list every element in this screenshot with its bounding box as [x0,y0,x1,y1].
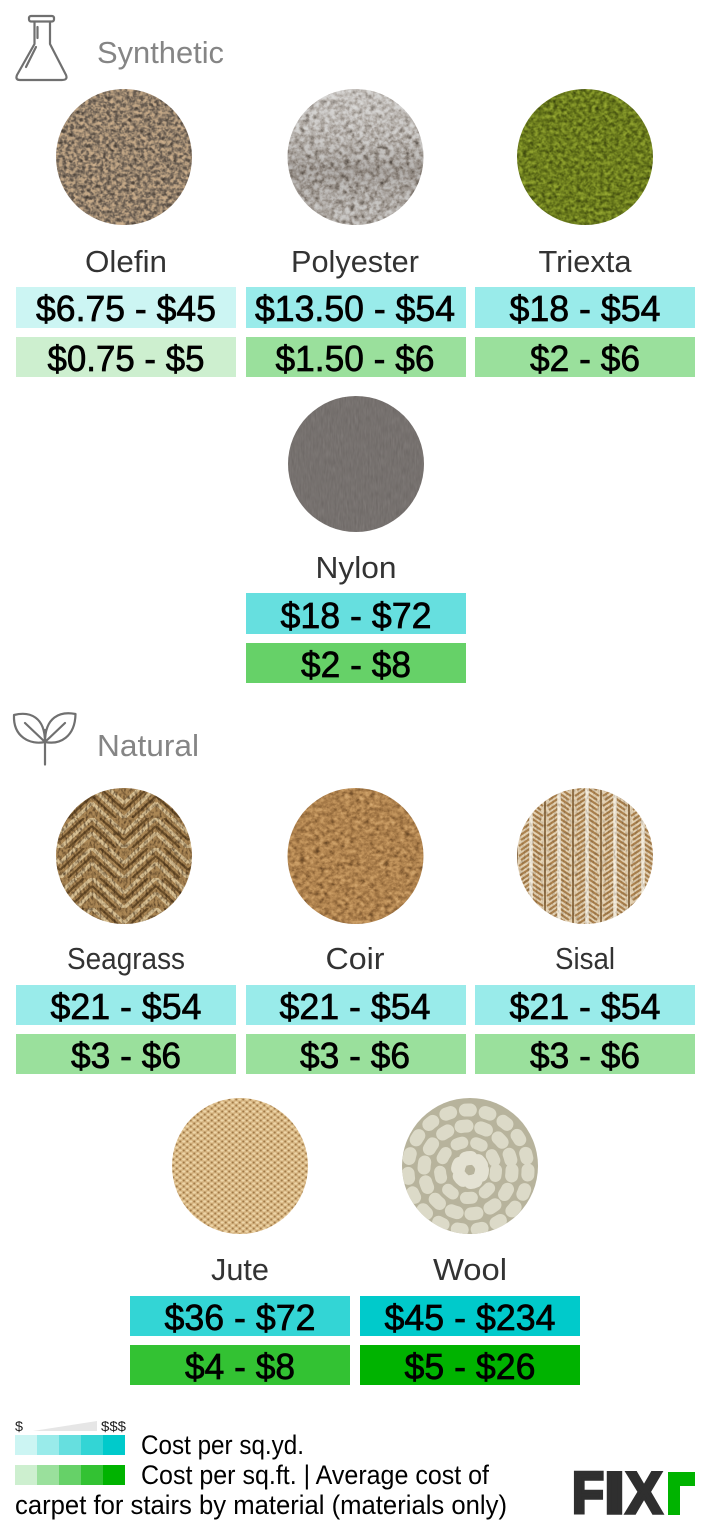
cost per sq.ft.: $5 - $26 [404,1346,536,1387]
card: Wool [360,1098,580,1387]
cost per sq.yd.: $45 - $234 [384,1297,556,1338]
carpet swatch: Coir [287,788,424,924]
logo: Fixr [572,1461,695,1526]
cost per sq.yd. [475,287,695,329]
cost per sq.yd. [246,985,466,1027]
carpet swatch: Seagrass [56,788,192,924]
label: Nylon [316,550,396,585]
label: Triexta [538,244,632,279]
cost per sq.ft. [130,1345,350,1387]
cost per sq.yd.: $21 - $54 [50,986,202,1027]
cost per sq.ft.: $4 - $8 [185,1346,295,1387]
heading text: Natural [97,728,199,763]
cost per sq.ft. [16,1034,236,1076]
legend text: sq.ft. and caption: Cost per sq.ft. | Average cost of [141,1460,489,1490]
label: Coir [326,941,384,976]
logo: Fixr: F [572,1461,604,1526]
swatches: cost per sq.yd. [15,1435,125,1455]
cost per sq.yd.: $13.50 - $54 [255,288,455,329]
label: Polyester [291,244,419,279]
label: Seagrass [67,941,185,976]
cost per sq.yd.: $21 - $54 [510,986,660,1027]
cost per sq.ft. [475,337,695,379]
label: Olefin [85,244,167,279]
cost per sq.ft. [360,1345,580,1387]
price scale wedge: $$$ [101,1418,126,1434]
card: Nylon [246,396,466,685]
cost per sq.yd.: $36 - $72 [164,1297,316,1338]
cost per sq.ft.: $2 - $8 [301,644,411,685]
cost per sq.yd. [16,985,236,1027]
card: Jute [130,1098,350,1387]
logo: Fixr: I [604,1461,625,1526]
cost per sq.yd.: $21 - $54 [280,986,430,1027]
section heading: Synthetic [16,16,224,80]
cost per sq.yd.: $6.75 - $45 [36,288,216,329]
label: Jute [211,1252,269,1287]
card: Triexta [475,89,695,379]
cost per sq.ft.: $3 - $6 [71,1035,181,1076]
carpet swatch: Triexta [517,89,653,225]
card: Sisal [475,788,695,1076]
carpet swatch: Olefin [56,89,192,225]
logo: Fixr: r [668,1470,680,1526]
logo: Fixr: X [626,1461,662,1526]
card: Seagrass [16,788,236,1076]
caption continuation: carpet for stairs by material (materials only) [15,1490,507,1520]
card: Coir [246,788,466,1076]
carpet swatch: Wool [402,1098,538,1234]
price scale wedge: $ [15,1418,23,1434]
cost per sq.yd. [246,593,466,636]
cost per sq.ft. [475,1034,695,1076]
heading text: Synthetic [97,35,224,70]
icon: sprout [14,713,76,764]
icon: flask [16,16,66,80]
cost per sq.ft.: $3 - $6 [300,1035,410,1076]
legend text: sq.yd.: Cost per sq.yd. [141,1430,304,1460]
legend [15,1418,507,1520]
cost per sq.ft.: $3 - $6 [530,1035,640,1076]
label: Wool [433,1252,507,1287]
price scale wedge [15,1418,126,1434]
cost per sq.ft.: $1.50 - $6 [276,338,434,379]
cost per sq.yd. [130,1296,350,1338]
cost per sq.ft.: $2 - $6 [530,338,640,379]
carpet swatch: Nylon [288,396,424,532]
carpet swatch: Jute [172,1098,308,1234]
card: Olefin [16,89,236,379]
cost per sq.yd.: $18 - $54 [510,288,660,329]
swatches: cost per sq.ft. [15,1465,125,1485]
cost per sq.ft. [246,1034,466,1076]
carpet swatch: Polyester [287,89,424,225]
label: Sisal [555,941,615,976]
section heading: Natural [14,713,199,764]
cost per sq.ft. [246,643,466,685]
carpet swatch: Sisal [517,788,653,924]
cost per sq.ft.: $0.75 - $5 [48,338,204,379]
card: Polyester [246,89,466,379]
cost per sq.yd.: $18 - $72 [280,595,432,636]
cost per sq.yd. [475,985,695,1027]
